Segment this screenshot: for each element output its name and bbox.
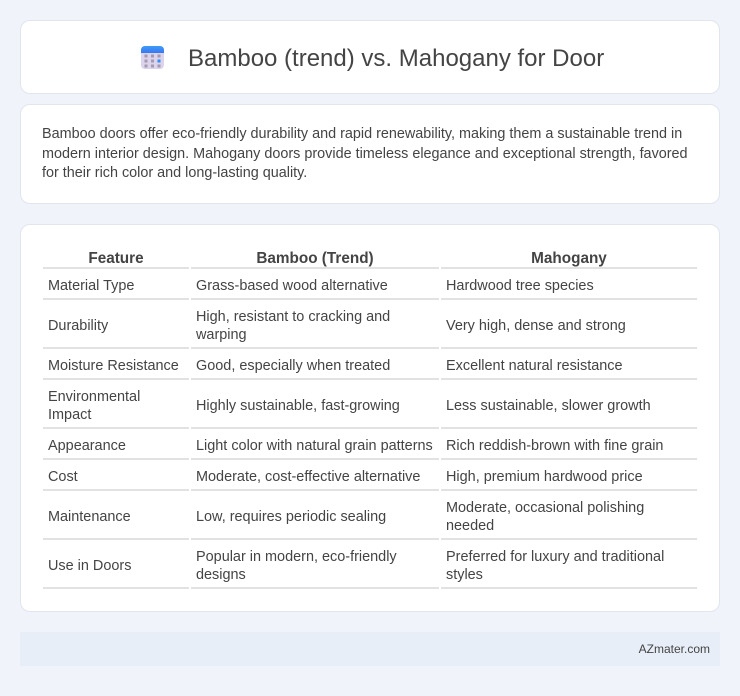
comparison table: Preferred for luxury and traditional [446, 548, 664, 564]
comparison table: Cost [48, 468, 78, 484]
intro paragraph: modern interior design. Mahogany doors provide timeless elegance and exceptional strength, favored [42, 146, 688, 162]
comparison table: Highly sustainable, fast-growing [196, 398, 400, 414]
comparison table: designs [196, 566, 246, 582]
comparison table: Mahogany [531, 250, 607, 267]
title: Bamboo (trend) vs. Mahogany for Door [188, 45, 604, 72]
comparison table: Rich reddish-brown with fine grain [446, 438, 663, 454]
comparison table [43, 250, 697, 589]
comparison table: needed [446, 518, 494, 534]
footer bar [20, 632, 720, 666]
comparison table: styles [446, 566, 483, 582]
panel: intro text [20, 104, 720, 204]
comparison table: Bamboo (Trend) [256, 250, 374, 267]
comparison table: Use in Doors [48, 558, 131, 574]
comparison table: Moderate, cost-effective alternative [196, 468, 420, 484]
comparison table: Feature [88, 250, 144, 267]
panel: comparison table [20, 224, 720, 612]
comparison table: Grass-based wood alternative [196, 278, 388, 294]
comparison table: Appearance [48, 438, 126, 454]
comparison table: High, resistant to cracking and [196, 308, 390, 324]
comparison table: Material Type [48, 278, 134, 294]
comparison table: Impact [48, 406, 91, 422]
comparison table: Moisture Resistance [48, 358, 179, 374]
comparison table: Popular in modern, eco-friendly [196, 548, 397, 564]
comparison table: warping [196, 326, 247, 342]
comparison table: Less sustainable, slower growth [446, 398, 651, 414]
comparison table: Hardwood tree species [446, 278, 594, 294]
comparison table: Good, especially when treated [196, 358, 390, 374]
comparison table: Light color with natural grain patterns [196, 438, 433, 454]
comparison table: Environmental [48, 388, 140, 404]
footer credit: AZmater.com [639, 642, 710, 656]
comparison table: Very high, dense and strong [446, 318, 626, 334]
header card [20, 20, 720, 94]
comparison table: High, premium hardwood price [446, 468, 643, 484]
comparison table: Durability [48, 318, 108, 334]
comparison table: Maintenance [48, 508, 131, 524]
comparison table: Low, requires periodic sealing [196, 508, 386, 524]
comparison table: Excellent natural resistance [446, 358, 623, 374]
comparison table: Moderate, occasional polishing [446, 500, 644, 516]
intro paragraph: for their rich color and long-lasting quality. [42, 165, 307, 181]
intro paragraph [42, 126, 688, 181]
icon: calendar [141, 46, 164, 69]
intro paragraph: Bamboo doors offer eco-friendly durability and rapid renewability, making them a sustainable trend in [42, 126, 682, 142]
